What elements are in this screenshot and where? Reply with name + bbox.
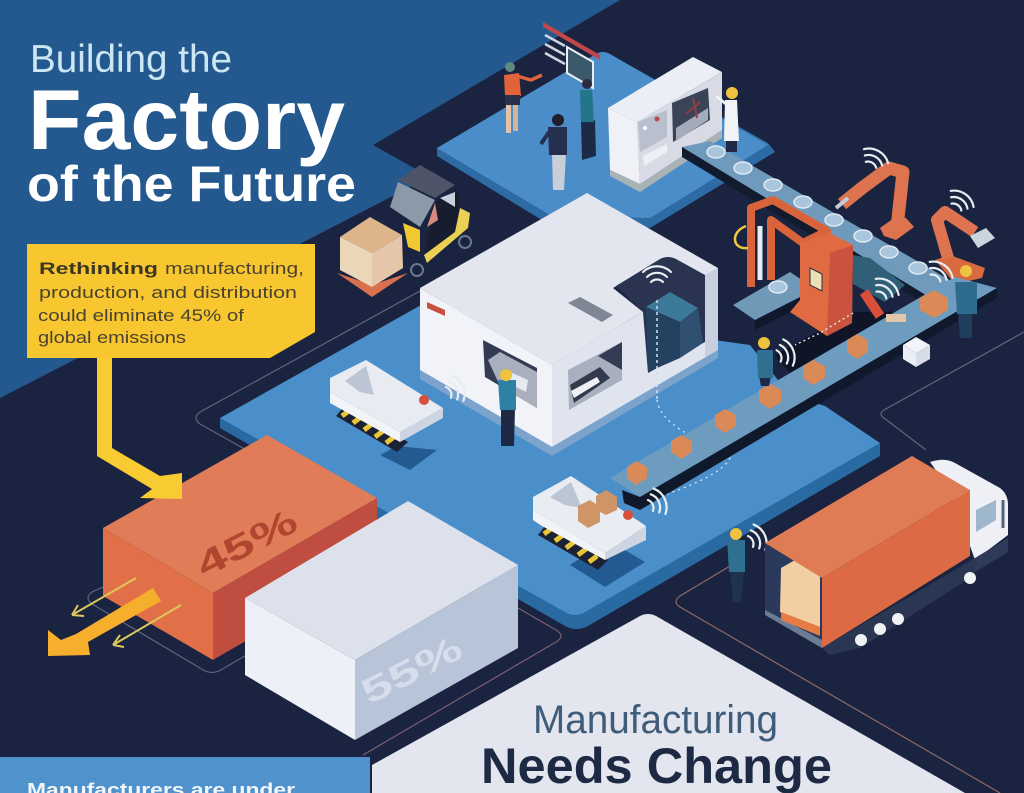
wifi: conveyor end (924, 257, 956, 286)
title: Building the (30, 38, 232, 81)
dark floor behind conveyor (775, 312, 905, 385)
callout text: production, and distribution (39, 283, 297, 302)
window: left (483, 340, 537, 408)
wifi: right arm (945, 186, 977, 215)
data link dotted (655, 400, 730, 498)
robotic arm: right (935, 212, 995, 284)
building: central machine (420, 193, 718, 456)
short conveyor (755, 296, 802, 330)
callout text: manufacturing, (165, 259, 304, 278)
agv cart: lower (533, 476, 646, 587)
callout box (27, 244, 315, 358)
white 55% block (245, 501, 518, 740)
forklift (337, 165, 471, 297)
cab (930, 460, 1008, 560)
bottom light panel (372, 614, 965, 793)
teal machine bed (853, 255, 905, 302)
title (27, 38, 356, 212)
machine: top cnc (608, 57, 722, 192)
conveyor: upper (682, 141, 955, 306)
arrows: thin outgoing (72, 578, 181, 647)
person: worker by truck (727, 528, 745, 602)
wifi: left arm (859, 144, 891, 172)
small red robot (864, 292, 906, 318)
truck (765, 456, 1008, 655)
platform: upper (437, 52, 775, 228)
white cube (903, 337, 930, 367)
wheels (855, 572, 976, 646)
bottom blue panel (0, 757, 370, 793)
outline paths on floor (88, 280, 1024, 793)
server alcove (616, 257, 705, 373)
person: woman in orange (504, 62, 542, 133)
parcels in cart (578, 490, 617, 528)
red 45% block (103, 435, 377, 660)
chassis (822, 558, 975, 655)
container rear opening (765, 543, 822, 648)
conveyor parts (707, 146, 927, 274)
container (765, 456, 970, 578)
wall display screen (543, 22, 600, 88)
arrow: yellow callout arrow (97, 358, 182, 499)
window: right (568, 342, 622, 410)
title: of the Future (27, 156, 356, 212)
person: operator at window (498, 369, 516, 446)
wifi: small robot (870, 274, 902, 303)
section heading: Manufacturing (533, 698, 778, 742)
person: inspector right (955, 265, 977, 338)
bottom light panel: Needs Change (481, 738, 832, 793)
robotic arm: left (836, 168, 914, 240)
person: worker by conveyor (757, 337, 773, 386)
agv cart: upper (330, 360, 443, 470)
person: scientist in white coat (716, 87, 739, 152)
label: 45%: 45% (190, 501, 304, 585)
label: 55%: 55% (355, 628, 469, 712)
title: Factory (28, 73, 345, 168)
blue header background (0, 0, 620, 398)
orange gantry robot (733, 200, 853, 345)
wifi: cart lower (645, 486, 671, 518)
wifi: truck worker (745, 522, 771, 554)
parcels (627, 290, 948, 485)
callout text: Rethinking (39, 259, 158, 278)
conveyor: lower (610, 277, 997, 510)
wifi: worker (774, 337, 798, 369)
wifi: building (643, 266, 671, 282)
person: man in navy (541, 114, 567, 190)
person: man in teal (580, 79, 596, 160)
callout text: could eliminate 45% of (38, 306, 244, 325)
callout text: global emissions (38, 328, 186, 347)
arrow: thick orange outgoing (48, 588, 161, 656)
cargo box (780, 560, 820, 627)
wifi: cart upper (443, 373, 469, 405)
forklift cargo (337, 273, 408, 297)
platform: main (220, 300, 880, 629)
